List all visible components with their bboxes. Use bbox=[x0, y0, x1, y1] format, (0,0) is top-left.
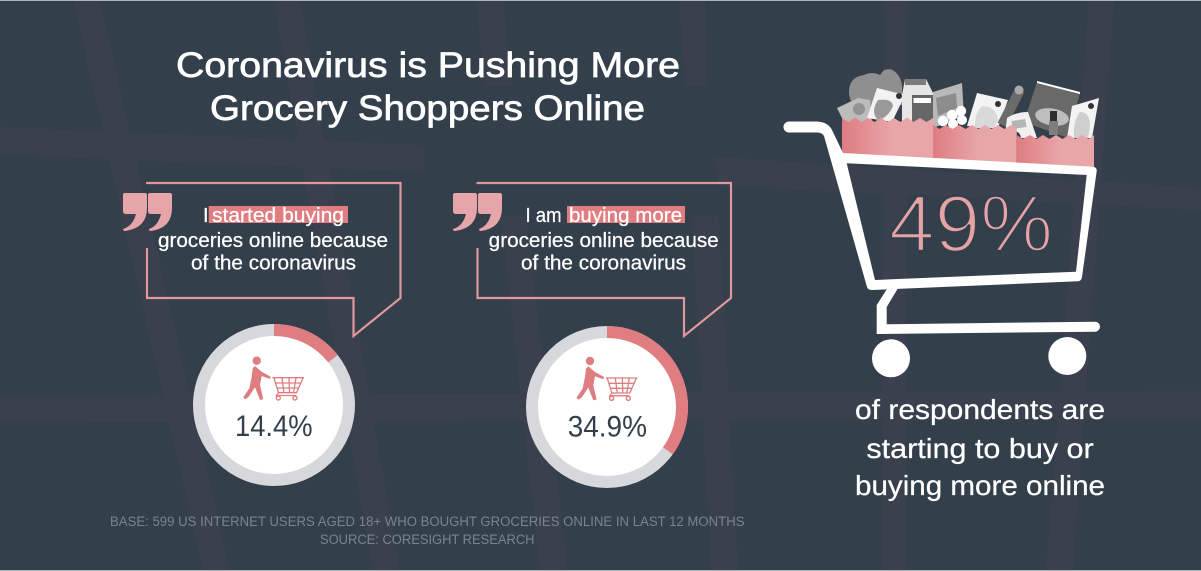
panel: shopping cart bbox=[784, 69, 1100, 377]
source note: BASE: 599 US INTERNET USERS AGED 18+ WHO BOUGHT GROCERIES ONLINE IN LAST 12 MONTHS bbox=[110, 514, 744, 529]
milk carton bbox=[902, 79, 933, 122]
arc: 34.9 percent bbox=[607, 332, 682, 451]
panel: callout started buying bbox=[123, 183, 400, 336]
highlight bbox=[209, 206, 348, 223]
quote text: I am bbox=[526, 205, 562, 227]
icon: shopper with cart bbox=[577, 357, 637, 400]
meat package bbox=[867, 88, 905, 122]
quote text: buying more bbox=[569, 205, 682, 227]
source note bbox=[110, 514, 744, 547]
respondents caption: buying more online bbox=[855, 470, 1105, 501]
panel: callout buying more bbox=[453, 183, 731, 336]
icon: quotation marks bbox=[453, 193, 502, 231]
value: 34.9% bbox=[568, 410, 647, 444]
source note: SOURCE: CORESIGHT RESEARCH bbox=[320, 532, 534, 547]
callout outline bbox=[476, 183, 731, 336]
paper bags bbox=[842, 118, 1094, 168]
quote text: of the coronavirus bbox=[521, 252, 686, 274]
cart frame bbox=[784, 122, 1097, 290]
quote text: of the coronavirus bbox=[191, 252, 356, 274]
cheese bbox=[837, 98, 872, 124]
callout outline bbox=[146, 183, 400, 336]
donut chart: 34.9% bbox=[532, 332, 682, 482]
respondents caption: starting to buy or bbox=[866, 433, 1094, 464]
eggs bbox=[938, 106, 967, 129]
icon: shopper with cart bbox=[243, 356, 304, 400]
icon: quotation marks bbox=[123, 193, 172, 231]
respondents caption: of respondents are bbox=[855, 394, 1105, 425]
lettuce bbox=[849, 69, 902, 108]
cart wheels bbox=[872, 339, 910, 377]
box bbox=[933, 83, 964, 128]
highlight bbox=[567, 206, 685, 223]
respondents caption bbox=[855, 394, 1105, 501]
value: 14.4% bbox=[235, 410, 312, 443]
big number: 49% bbox=[889, 179, 1053, 268]
quote text: started buying bbox=[212, 205, 344, 227]
quote text bbox=[489, 205, 719, 274]
quote text: groceries online because bbox=[489, 230, 719, 252]
donut chart: 14.4% bbox=[199, 330, 349, 480]
quote text bbox=[158, 205, 388, 274]
quote text: I bbox=[203, 205, 209, 227]
cart undercarriage bbox=[877, 289, 1100, 334]
title bbox=[176, 46, 680, 128]
groceries bbox=[837, 69, 1099, 138]
poultry package bbox=[967, 93, 1008, 128]
white container bbox=[1005, 112, 1037, 138]
dark snack bag bbox=[1024, 82, 1080, 138]
arc: 14.4 percent bbox=[274, 330, 333, 359]
fish package bbox=[1067, 98, 1099, 138]
title: Coronavirus is Pushing More bbox=[176, 46, 680, 85]
baguette bbox=[1002, 90, 1020, 125]
quote text: groceries online because bbox=[158, 230, 388, 252]
title: Grocery Shoppers Online bbox=[210, 89, 645, 128]
